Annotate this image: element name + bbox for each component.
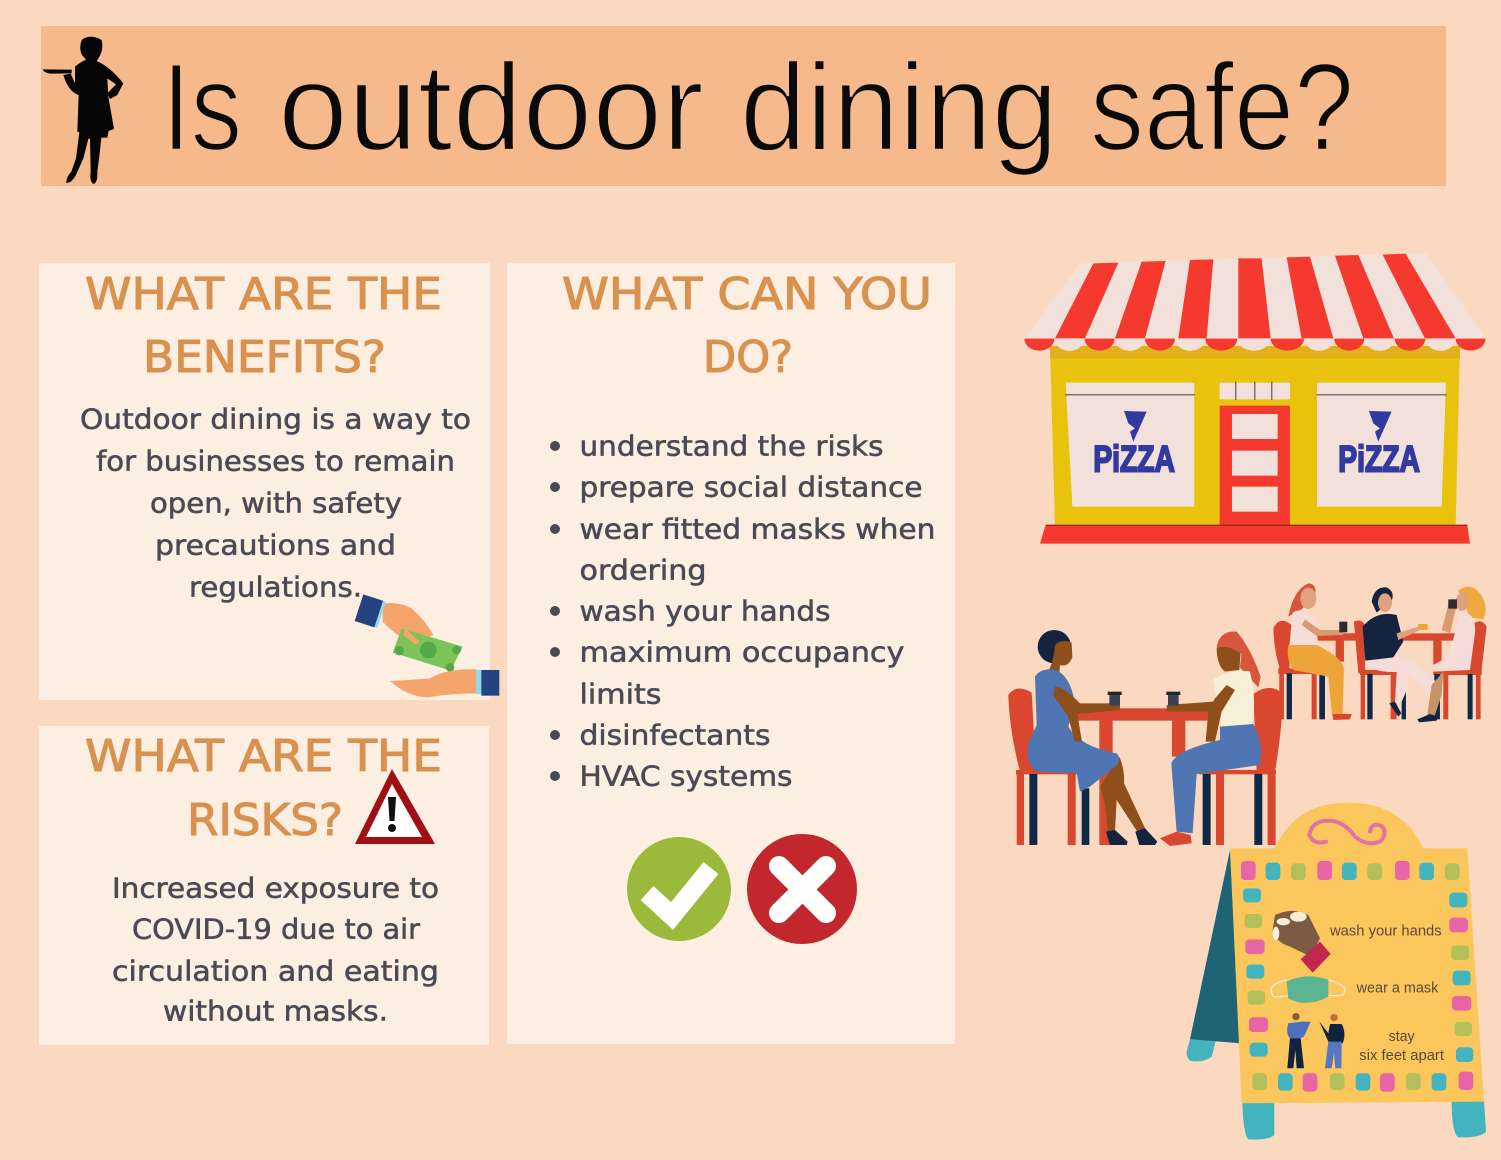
- heading: risks: [85, 731, 442, 846]
- heading: risks: WHAT ARE THE: [85, 731, 442, 782]
- list: actions: [550, 430, 936, 792]
- woman in yellow trousers: [1288, 583, 1352, 720]
- text: benefits body: [80, 404, 471, 604]
- icon: washing hands: [1273, 911, 1331, 973]
- icon: waitress silhouette: [43, 37, 123, 184]
- icon: two people apart: [1287, 1013, 1344, 1068]
- woman in blue dress: [1028, 630, 1157, 845]
- text: wash your hands: wash your hands: [1329, 924, 1442, 940]
- icon: green check: [627, 837, 731, 941]
- right chair: [1198, 688, 1283, 845]
- list: actions: wear fitted masks when: [580, 514, 936, 546]
- illustration: three women at table: [1008, 583, 1487, 846]
- icon: red cross: [747, 834, 857, 944]
- text: stay six feet apart: [1359, 1029, 1444, 1064]
- icon: face mask: [1271, 976, 1345, 1003]
- title banner: [41, 26, 1446, 186]
- list: actions: disinfectants: [580, 720, 770, 752]
- title: dining: [740, 39, 1058, 177]
- left window: PiZZA: [1093, 438, 1175, 480]
- text: benefits body: open, with safety: [150, 488, 402, 520]
- list: actions: limits: [580, 678, 662, 710]
- illustration: pizza shop: [1024, 253, 1486, 544]
- woman with blonde hair: [1417, 587, 1486, 722]
- panel: what can you do: [507, 263, 955, 1044]
- heading: what can you do: DO?: [703, 332, 793, 383]
- list: actions: ordering: [580, 554, 706, 586]
- table: [1072, 708, 1213, 845]
- heading: what can you do: [562, 269, 932, 383]
- heading: benefits: BENEFITS?: [143, 332, 386, 383]
- title: safe?: [1090, 39, 1354, 177]
- icon: pink scroll: [1309, 821, 1385, 843]
- text: benefits body: precautions and: [155, 530, 396, 562]
- title: Is: [162, 39, 242, 177]
- list: actions: wash your hands: [580, 596, 830, 628]
- list: actions: maximum occupancy: [580, 636, 904, 668]
- text: risks body: without masks.: [163, 996, 388, 1028]
- heading: risks: RISKS?: [187, 795, 343, 846]
- illustration: safety sign board: [1187, 803, 1486, 1140]
- text: benefits body: for businesses to remain: [96, 446, 455, 478]
- right window: [1317, 383, 1447, 507]
- left chair: [1008, 689, 1078, 845]
- icon: warning triangle: [355, 769, 435, 844]
- panel: benefits: [39, 263, 490, 700]
- text: risks body: circulation and eating: [112, 956, 439, 988]
- text: risks body: COVID-19 due to air: [132, 914, 421, 946]
- woman in navy top: [1363, 587, 1437, 717]
- heading: benefits: WHAT ARE THE: [85, 269, 442, 320]
- list: actions: HVAC systems: [580, 760, 792, 792]
- text: benefits body: regulations.: [189, 572, 362, 604]
- transom window: [1220, 382, 1290, 400]
- woman in cream top: [1160, 632, 1261, 846]
- text: benefits body: Outdoor dining is a way to: [80, 404, 471, 436]
- list: actions: prepare social distance: [580, 472, 922, 504]
- heading: benefits: [85, 269, 442, 383]
- door: [1220, 406, 1290, 526]
- left window: [1065, 383, 1195, 507]
- panel: risks: [39, 726, 489, 1045]
- heading: what can you do: WHAT CAN YOU: [562, 269, 932, 320]
- text: wear a mask: wear a mask: [1356, 980, 1439, 996]
- text: risks body: Increased exposure to: [112, 872, 439, 904]
- title: outdoor: [278, 39, 704, 177]
- right window: PiZZA: [1338, 438, 1420, 480]
- text: stay six feet apart: six feet apart: [1359, 1048, 1444, 1064]
- list: actions: understand the risks: [580, 430, 884, 462]
- icon: hands exchanging money: [355, 594, 499, 697]
- text: stay six feet apart: stay: [1389, 1029, 1415, 1045]
- text: risks body: [112, 872, 439, 1028]
